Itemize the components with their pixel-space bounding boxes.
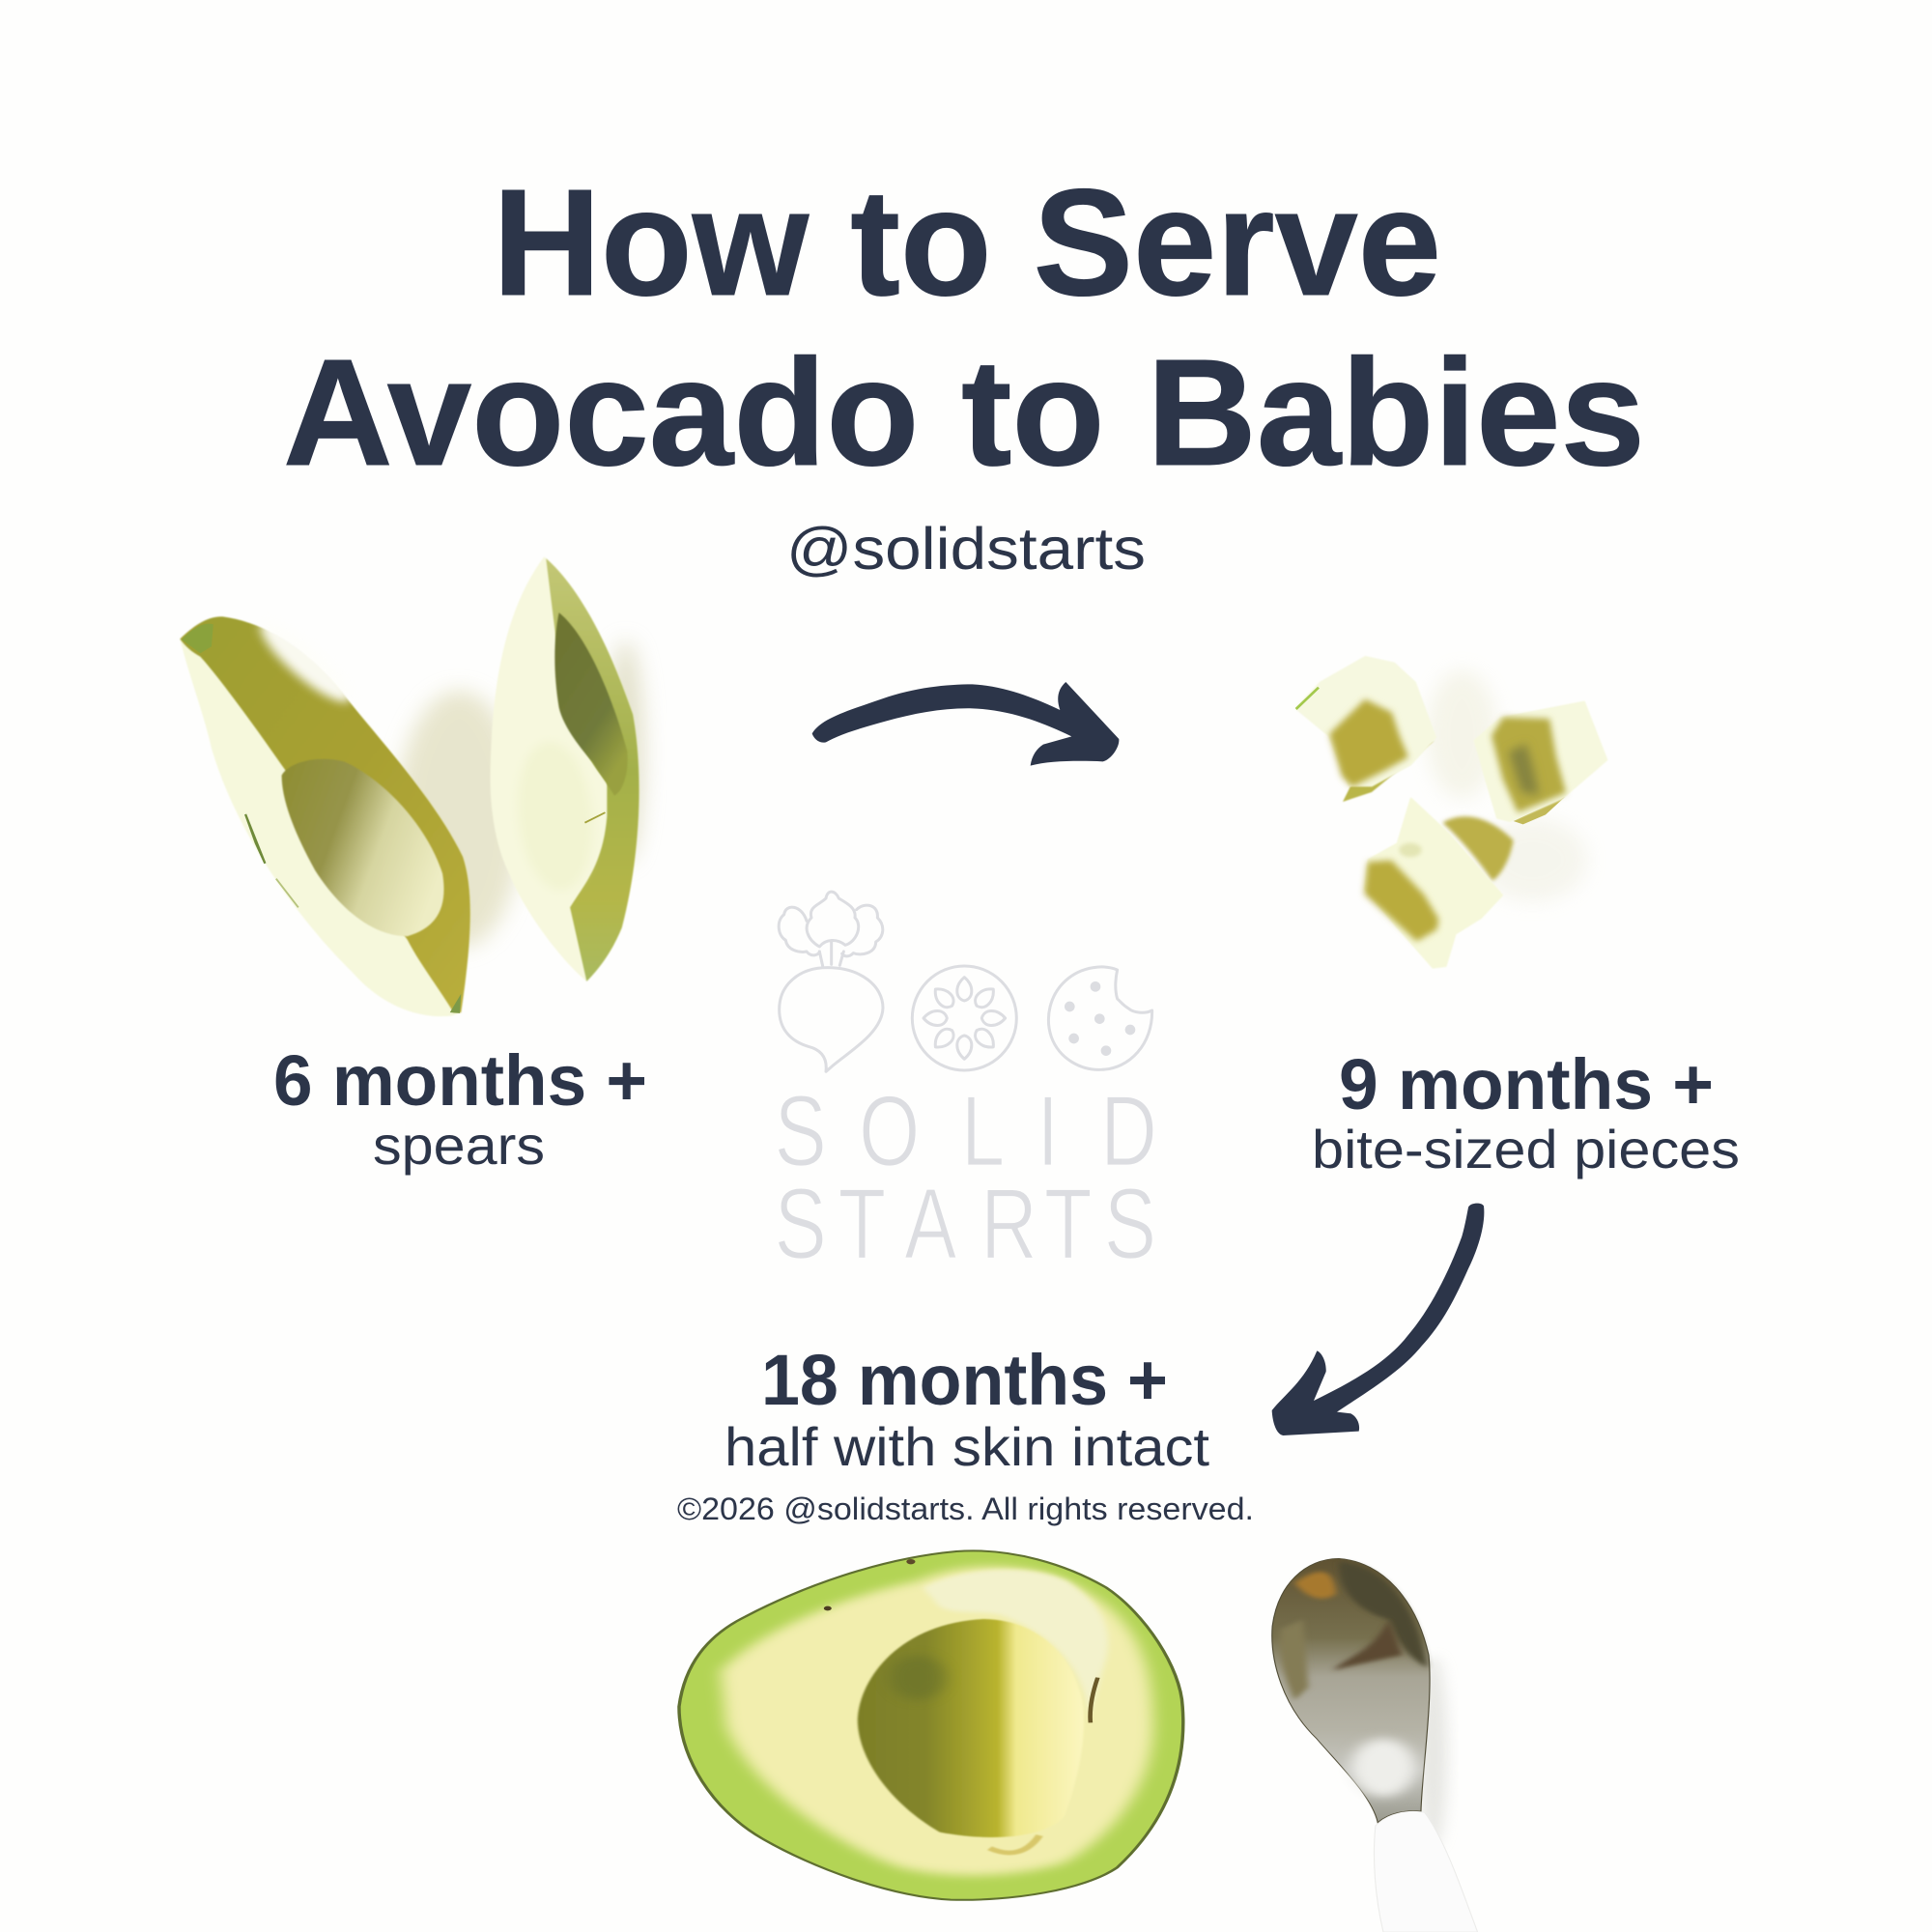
- image: avocado half: [679, 1550, 1183, 1900]
- label: 18 months: half with skin intact: [724, 1416, 1209, 1477]
- label: 18 months: 18 months +: [761, 1340, 1168, 1420]
- spear 2: [490, 556, 639, 981]
- piece 3: [1365, 799, 1514, 968]
- spoon bowl: [1272, 1558, 1430, 1823]
- piece 1: [1296, 657, 1435, 802]
- image: avocado bite-sized pieces: [1296, 657, 1606, 968]
- icon: cookie: [1048, 967, 1152, 1069]
- label: 6 months: 6 months +: [273, 1040, 647, 1121]
- title: How to Serve: [493, 158, 1441, 327]
- title: Avocado to Babies: [283, 328, 1645, 497]
- copyright: ©2026 @solidstarts. All rights reserved.: [677, 1492, 1254, 1526]
- wordmark: [775, 1075, 1157, 1280]
- label: 6 months: [273, 1040, 647, 1176]
- spear 1: [180, 611, 470, 1016]
- label: 9 months: bite-sized pieces: [1312, 1119, 1740, 1179]
- wordmark: STARTS: [775, 1168, 1156, 1280]
- piece 2: [1475, 702, 1606, 824]
- avocado pit hollow: [858, 1619, 1084, 1837]
- wordmark: SOLID: [775, 1075, 1157, 1187]
- arrow: 6 months to 9 months: [812, 682, 1119, 766]
- spoon handle: [1374, 1811, 1478, 1932]
- icon: beet: [779, 892, 883, 1071]
- image: spoon: [1272, 1558, 1478, 1932]
- label: 9 months: 9 months +: [1339, 1044, 1714, 1124]
- arrow: 9 months to 18 months: [1272, 1204, 1484, 1435]
- label: 18 months: [724, 1340, 1209, 1477]
- handle: @solidstarts: @solidstarts: [786, 516, 1146, 582]
- title: [283, 158, 1645, 497]
- label: 9 months: [1312, 1044, 1740, 1179]
- image: avocado spears: [180, 556, 644, 1016]
- logo: Solid Starts watermark: [775, 892, 1157, 1280]
- label: 6 months: spears: [373, 1115, 545, 1176]
- icon: tomato slice: [912, 966, 1016, 1070]
